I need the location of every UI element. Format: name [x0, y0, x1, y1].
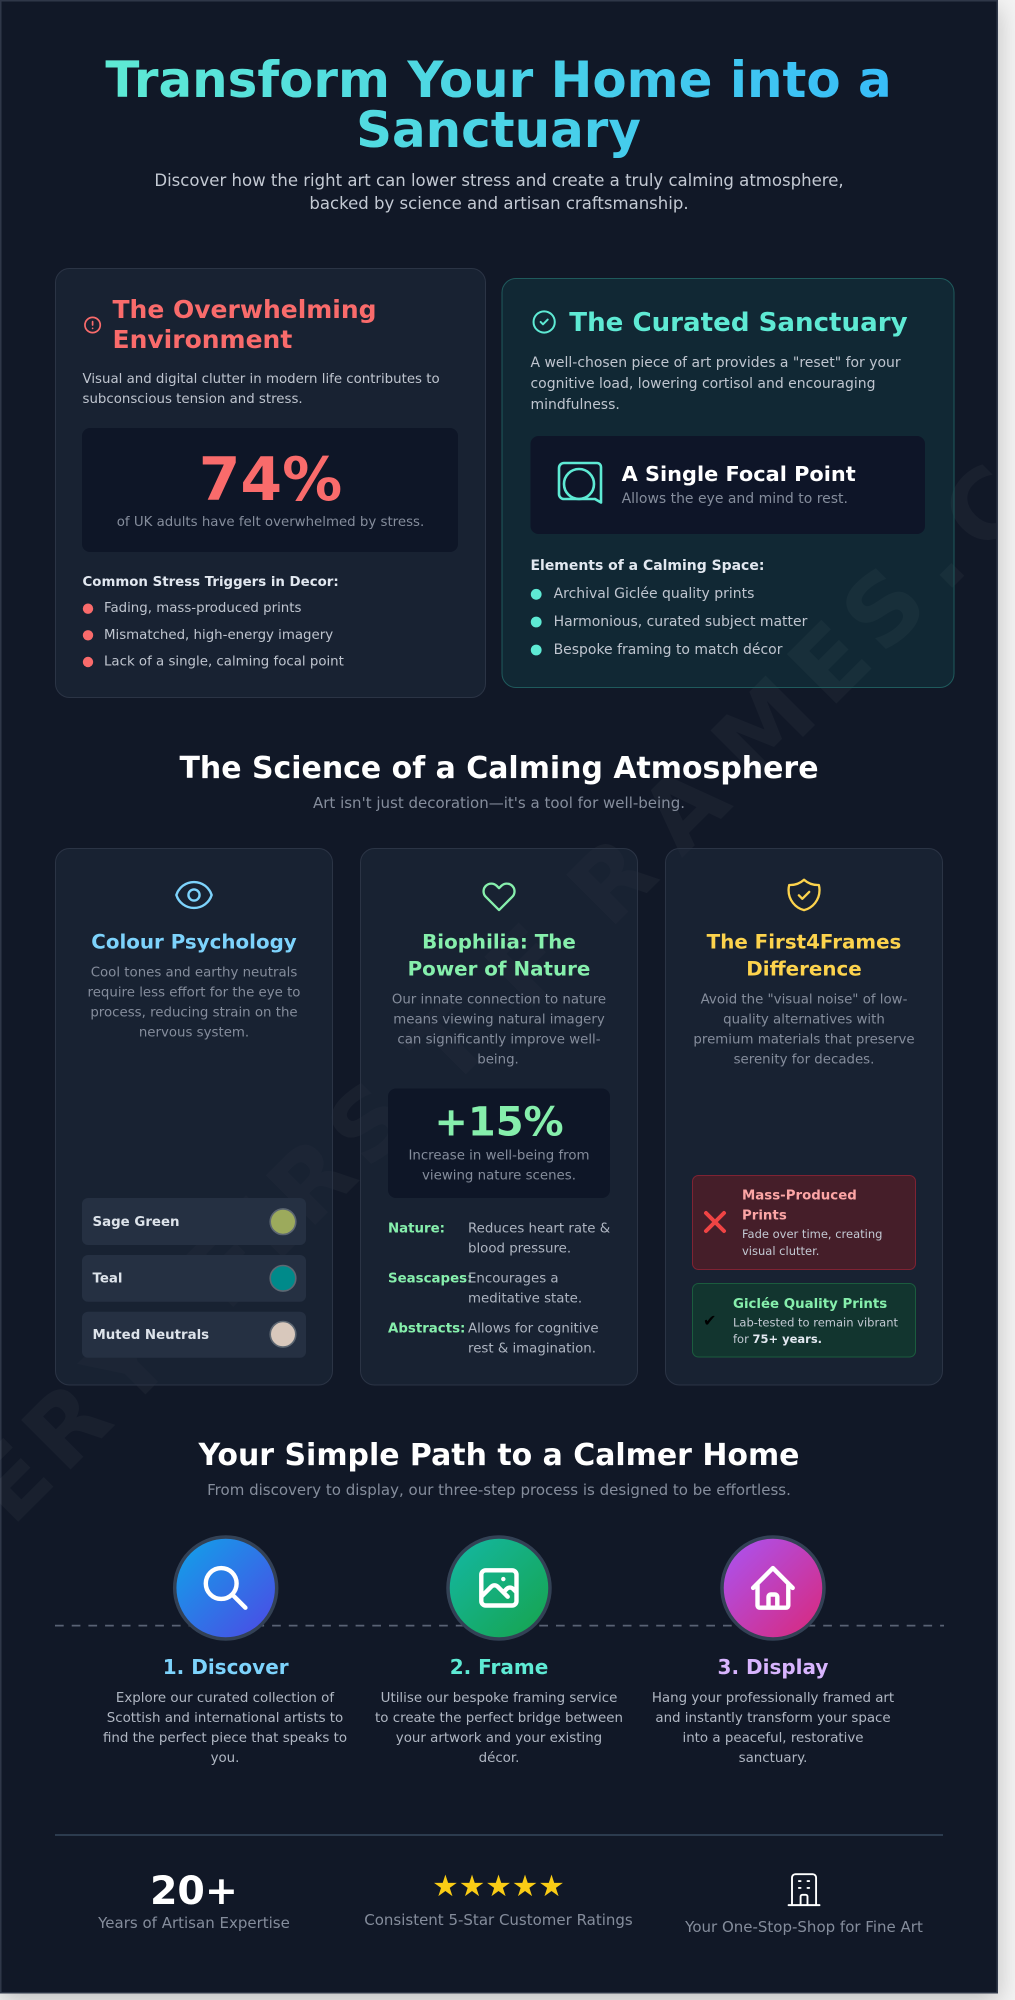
callout: single focal point: A Single Focal Point	[622, 462, 856, 486]
step 2: frame: to create the perfect bridge between	[375, 1711, 623, 1726]
comparison: mass-produced prints: visual clutter.	[742, 1244, 819, 1258]
swatch: muted neutrals	[82, 1312, 306, 1358]
step 3: display: sanctuary.	[739, 1751, 807, 1766]
list: calming elements: Bespoke framing to match décor	[554, 642, 783, 658]
intro text: mindfulness.	[530, 397, 620, 413]
subtitle	[154, 171, 844, 213]
description: can significantly improve well-	[397, 1032, 601, 1047]
step 1: discover	[103, 1537, 347, 1766]
comparison: giclee prints	[692, 1284, 916, 1357]
stat box: +15%	[388, 1088, 610, 1198]
step 3: display: Hang your professionally framed art	[652, 1691, 894, 1706]
subject list: Encourages a	[468, 1271, 559, 1286]
icon: cross	[706, 1213, 724, 1231]
description	[88, 966, 300, 1040]
heading: difference: The First4Frames	[707, 930, 901, 954]
description: process, reducing strain on the	[90, 1006, 298, 1020]
heading: biophilia	[408, 930, 590, 980]
list: stress triggers: Fading, mass-produced prints	[104, 601, 301, 616]
step 2: frame: décor.	[479, 1750, 519, 1766]
title: Sanctuary	[356, 101, 641, 159]
panel: overwhelming environment	[56, 268, 486, 698]
swatch: teal	[82, 1255, 306, 1302]
stat: star ratings	[364, 1869, 633, 1929]
heading: difference: Difference	[746, 958, 862, 980]
comparison: mass-produced prints: Prints	[742, 1209, 787, 1224]
step 3: display	[652, 1537, 894, 1766]
icon: check mark: ✔	[703, 1311, 716, 1330]
step 1: discover: find the perfect piece that speaks to	[103, 1731, 347, 1746]
heading: overwhelming: The Overwhelming	[112, 295, 377, 324]
subject list: meditative state.	[468, 1291, 582, 1306]
list: stress triggers: Common Stress Triggers in Decor:	[82, 575, 339, 590]
title	[105, 51, 892, 159]
description: premium materials that preserve	[693, 1032, 915, 1047]
comparison: mass-produced prints: Fade over time, creating	[742, 1227, 882, 1241]
icon: alert	[85, 317, 100, 333]
intro text	[530, 355, 901, 413]
comparison: giclee prints: for 75+ years.	[733, 1332, 822, 1346]
stat: years of expertise: 20+	[150, 1868, 238, 1914]
comparison: giclee prints: Lab-tested to remain vibrant	[733, 1315, 899, 1329]
dashed connector	[55, 1625, 944, 1627]
heading: biophilia: Biophilia: The	[422, 930, 576, 954]
comparison: giclee prints: Giclée Quality Prints	[733, 1296, 887, 1312]
stat: star ratings: Consistent 5-Star Customer Ratings	[364, 1911, 633, 1929]
step 2: frame	[375, 1537, 623, 1766]
list: stress triggers: Mismatched, high-energy imagery	[104, 628, 333, 643]
stat: years of expertise	[97, 1868, 290, 1932]
list: stress triggers	[82, 575, 344, 670]
heading: overwhelming: Environment	[112, 325, 292, 354]
list: stress triggers: Lack of a single, calming focal point	[104, 654, 344, 670]
description: being.	[477, 1052, 519, 1067]
intro text: cognitive load, lowering cortisol and encouraging	[530, 376, 875, 392]
panel: colour psychology	[56, 848, 332, 1385]
stat box: 74%: of UK adults have felt overwhelmed by stress.	[117, 515, 424, 530]
stat box: +15%: +15%	[434, 1100, 564, 1146]
icon: check circle	[534, 311, 555, 333]
heading: biophilia: Power of Nature	[408, 958, 590, 980]
subject list: Seascapes:	[388, 1271, 472, 1286]
stat box: +15%: viewing nature scenes.	[422, 1168, 576, 1183]
stat: one-stop shop	[684, 1874, 923, 1936]
list: calming elements	[530, 558, 808, 658]
icon: focal point	[559, 463, 601, 502]
heading: difference	[707, 930, 901, 980]
stat: years of expertise: Years of Artisan Expertise	[97, 1914, 290, 1932]
description: serenity for decades.	[734, 1052, 874, 1067]
description: quality alternatives with	[723, 1012, 885, 1027]
list: calming elements: Harmonious, curated subject matter	[554, 614, 808, 630]
step 2: frame: Utilise our bespoke framing service	[381, 1691, 617, 1706]
description: means viewing natural imagery	[393, 1012, 605, 1027]
step 1: discover: 1. Discover	[163, 1655, 289, 1679]
comparison: mass-produced prints	[692, 1176, 916, 1270]
subject list: Abstracts:	[388, 1321, 465, 1336]
intro text: A well-chosen piece of art provides a "reset" for your	[530, 355, 901, 371]
intro text	[82, 372, 440, 407]
section heading: science: The Science of a Calming Atmosphere	[180, 751, 818, 786]
icon: eye	[176, 882, 212, 908]
subject list: Nature:	[388, 1221, 445, 1236]
heading: curated sanctuary: The Curated Sanctuary	[569, 308, 908, 338]
description: Avoid the "visual noise" of low-	[701, 992, 908, 1007]
stat: star ratings: ★★★★★	[432, 1869, 565, 1903]
step 1: discover: Explore our curated collection of	[116, 1691, 334, 1706]
heading: colour psychology: Colour Psychology	[91, 930, 297, 954]
icon: home	[753, 1568, 793, 1608]
description	[693, 992, 915, 1067]
step 1: discover: you.	[211, 1751, 239, 1766]
step 3: display: and instantly transform your space	[655, 1711, 891, 1726]
subtitle: Discover how the right art can lower stress and create a truly calming atmosphere,	[154, 171, 844, 190]
section heading: path: Your Simple Path to a Calmer Home	[198, 1438, 800, 1473]
panel: curated sanctuary	[502, 278, 954, 688]
swatch: sage green	[82, 1198, 306, 1245]
step 2: frame: your artwork and your existing	[396, 1731, 602, 1746]
subject list: blood pressure.	[468, 1241, 571, 1256]
icon: heart	[484, 884, 515, 910]
subject list: Reduces heart rate &	[468, 1221, 610, 1236]
section subheading: science: Art isn't just decoration—it's a tool for well-being.	[313, 794, 685, 812]
stat box: 74%	[82, 428, 458, 552]
step 3: display: into a peaceful, restorative	[682, 1731, 864, 1746]
subject list	[388, 1221, 610, 1356]
section subheading: path: From discovery to display, our three-step process is designed to be effortless.	[207, 1481, 791, 1499]
title: Transform Your Home into a	[105, 51, 892, 109]
stat box: 74%: 74%	[199, 445, 342, 515]
callout: single focal point	[530, 436, 925, 534]
subject list: Allows for cognitive	[468, 1321, 599, 1336]
icon: building	[789, 1874, 820, 1905]
list: calming elements: Archival Giclée quality prints	[554, 586, 754, 602]
description: Cool tones and earthy neutrals	[91, 966, 297, 980]
intro text: subconscious tension and stress.	[82, 392, 303, 407]
stat: one-stop shop: Your One-Stop-Shop for Fine Art	[684, 1918, 923, 1936]
description: require less effort for the eye to	[88, 986, 300, 1000]
swatch: teal: Teal	[92, 1271, 122, 1286]
callout: single focal point: Allows the eye and mind to rest.	[622, 491, 848, 507]
subject list: rest & imagination.	[468, 1341, 596, 1356]
swatch: sage green: Sage Green	[92, 1215, 180, 1230]
heading: overwhelming	[112, 295, 377, 354]
swatch: muted neutrals: Muted Neutrals	[92, 1328, 209, 1343]
description	[392, 992, 606, 1067]
icon: search	[206, 1568, 245, 1608]
step 3: display: 3. Display	[718, 1655, 828, 1679]
list: calming elements: Elements of a Calming Space:	[530, 558, 764, 574]
step 1: discover: Scottish and international artists to	[107, 1711, 343, 1726]
icon: shield check	[789, 880, 820, 910]
icon: picture	[481, 1570, 516, 1606]
comparison: mass-produced prints: Mass-Produced	[742, 1189, 857, 1204]
description: nervous system.	[139, 1026, 249, 1040]
stat box: +15%: Increase in well-being from	[408, 1148, 590, 1163]
step 2: frame: 2. Frame	[450, 1655, 548, 1679]
panel: first4frames difference	[666, 848, 942, 1385]
subtitle: backed by science and artisan craftsmanship.	[309, 194, 689, 213]
description: Our innate connection to nature	[392, 992, 606, 1007]
intro text: Visual and digital clutter in modern life contributes to	[82, 372, 440, 387]
panel: biophilia	[360, 848, 638, 1385]
